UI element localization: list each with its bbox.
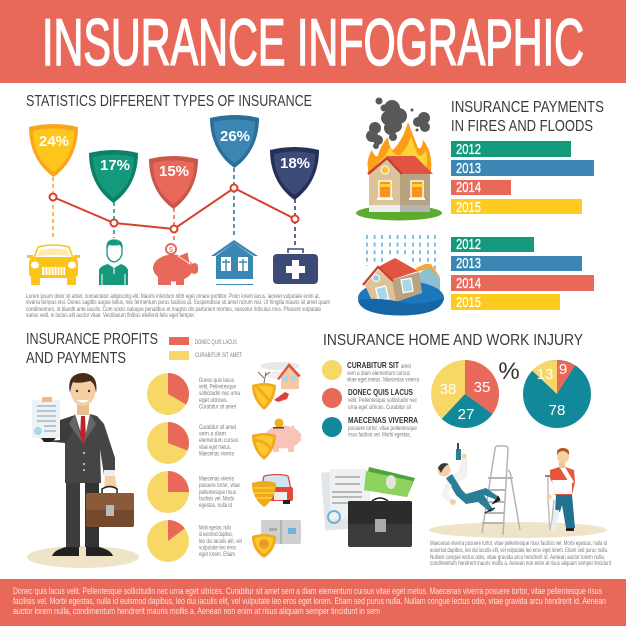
shield: 24%	[29, 124, 78, 177]
text block three: pellentesque risus	[199, 490, 236, 496]
legend: CURABITUR SIT AMET	[195, 353, 242, 359]
shield: 17%: 17%	[100, 157, 130, 174]
icon: parcel shield	[252, 520, 301, 558]
icon: piggy bank: $	[169, 247, 173, 254]
legend item: curabitur	[322, 360, 419, 384]
legend item: curabitur: amet	[401, 364, 411, 370]
text block two: Curabitur sit amet	[199, 425, 236, 431]
shield: 15%	[149, 156, 198, 209]
illustration: ladder	[482, 446, 520, 535]
icon: medical case	[273, 249, 318, 284]
bar chart: floods: 2014	[456, 275, 481, 292]
text block two: Maecenas viverra	[199, 452, 234, 458]
line chart	[50, 184, 298, 232]
illustration: burning house	[356, 98, 442, 220]
pie: second	[147, 422, 189, 464]
pie: third	[147, 471, 189, 513]
footer text: auctor lorem nulla, condimentum hendrerit mauris mollis a. Aenean non enim at risus aliquam semper tincidunt in sem	[13, 606, 380, 616]
panel: home and work injury	[321, 332, 611, 567]
shield: 18%	[270, 147, 319, 200]
pie: work: 9	[559, 361, 567, 378]
shield: 18%: 18%	[280, 155, 310, 172]
pie: fourth	[147, 520, 189, 562]
text: statistics lorem: varius velit, in luctus elit auctor vitae. Vestibulum finibus eleifend felis eget tempor.	[26, 313, 195, 319]
heading: statistics: STATISTICS DIFFERENT TYPES OF INSURANCE	[26, 93, 312, 110]
text block four: vulputate leo eros	[199, 546, 236, 552]
legend item: curabitur: CURABITUR SIT	[347, 360, 400, 370]
shield: 17%	[89, 150, 138, 203]
icon: house	[211, 240, 258, 285]
legend item: curabitur: sem a diam elementum cursus	[347, 371, 410, 377]
text block one: Curabitur sit amet	[199, 404, 236, 410]
legend: DONEC QUIS LACUS	[195, 340, 237, 346]
illustration: ground	[429, 522, 607, 538]
pie: home: 38	[440, 381, 456, 398]
text block one	[199, 378, 241, 410]
panel: statistics	[26, 93, 330, 319]
pie: home: 35	[474, 379, 490, 396]
shield: 26%	[210, 115, 259, 168]
dashed connectors	[53, 168, 295, 246]
bar chart: fires: 2013	[456, 160, 481, 177]
icon: person	[99, 240, 128, 285]
icon: piggy shield	[252, 418, 301, 460]
bar chart: fires	[451, 141, 594, 216]
icon: piggy bank	[153, 243, 198, 285]
bar chart: floods	[451, 236, 594, 311]
bar chart: floods: 2015	[456, 294, 481, 311]
text block three: Maecenas viverra	[199, 476, 234, 482]
bar chart: floods: 2012	[456, 236, 481, 253]
legend item: maecenas: MAECENAS VIVERRA	[348, 415, 418, 425]
bar chart: fires: 2015	[456, 199, 481, 216]
heading: injury: INSURANCE HOME AND WORK INJURY	[323, 332, 583, 349]
heading: profits	[26, 331, 158, 367]
text block four: leo dui iaculis elit, vel	[199, 539, 242, 545]
legend item: curabitur: vitae eget metus. Maecenas viverra	[347, 378, 419, 384]
legend item: donec: urna eget ultrices. Curabitur sit	[348, 405, 411, 411]
pie: first	[147, 373, 189, 415]
footer band	[0, 579, 626, 626]
text block one: sollicitudin nec urna	[199, 391, 241, 397]
text: statistics lorem	[26, 294, 330, 319]
heading: profits: AND PAYMENTS	[26, 350, 126, 367]
heading: profits: INSURANCE PROFITS	[26, 331, 158, 348]
heading: payments: IN FIRES AND FLOODS	[451, 118, 593, 135]
shield: 26%: 26%	[220, 128, 250, 145]
shield: 24%: 24%	[39, 133, 69, 150]
text block three: facilisis vel. Morbi	[199, 496, 234, 502]
legend item: maecenas: posuere tortor, vitae pellentesque	[348, 426, 418, 432]
text: statistics lorem: viverra tempus nisl. Donec sagittis augue tellus, nec fermentum purus facilisis at. Suspendisse sit amet rutrum nisl. Ut fringilla mauris sit amet quam	[26, 300, 330, 306]
text block two: elementum cursus	[199, 438, 238, 444]
percent sign: %	[498, 358, 520, 385]
legend item: donec: DONEC QUIS LACUS	[348, 387, 413, 397]
pie: work: 78	[549, 402, 565, 419]
text block one: Donec quis lacus	[199, 378, 234, 384]
pie: work	[523, 360, 591, 428]
text: statistics lorem: Lorem ipsum dolor sit amet, consectetur adipiscing elit. Mauris interdum nibh eget ornare porttitor. Proin lorem lacus, laoreet vulputate enim at,	[26, 294, 320, 300]
legend item: donec: velit. Pellentesque sollicitudin nec	[348, 398, 417, 404]
text block four: eget lorem. Etiam	[199, 552, 235, 558]
shield: 15%: 15%	[159, 163, 189, 180]
text block four	[199, 526, 242, 558]
pie: home: 27	[458, 406, 474, 423]
legend item: maecenas	[322, 415, 418, 438]
pie: home	[431, 360, 499, 428]
heading: payments	[451, 99, 604, 135]
illustration: businessman	[27, 373, 139, 568]
legend item: donec	[322, 387, 417, 411]
illustration: documents, money and briefcase	[321, 467, 415, 547]
legend	[169, 337, 242, 360]
bar chart: fires: 2012	[456, 141, 481, 158]
icon: disaster shield	[252, 362, 301, 410]
text block two	[199, 425, 238, 458]
bar chart: fires: 2014	[456, 179, 481, 196]
text block three: posuere tortor, vitae	[199, 483, 241, 489]
illustration: falling worker	[438, 443, 500, 513]
text block three	[199, 476, 241, 509]
header band	[0, 0, 626, 83]
panel: fires and floods	[356, 98, 604, 316]
text block one: velit. Pellentesque	[199, 384, 236, 390]
text: injury lorem	[430, 541, 611, 567]
bar chart: floods: 2013	[456, 255, 481, 272]
footer text	[13, 586, 606, 616]
text block four: Morbi egestas, nulla	[199, 526, 231, 532]
text block two: vitae eget metus.	[199, 445, 231, 451]
text: statistics lorem: condimentum, id blandit ante iaculis. Cum sociis natoque penatibus et magnis dis parturient montes, nascetur ridiculus mus. Phasent vulputate	[26, 307, 322, 313]
illustration: injured man	[545, 448, 575, 531]
text block three: egestas, nulla id	[199, 503, 232, 509]
text block two: sem a diam	[199, 432, 226, 438]
legend item: maecenas: risus facilisis vel. Morbi egestas,	[348, 432, 411, 438]
icon: car shield	[252, 474, 293, 507]
text block four: id euismod dapibus,	[199, 532, 233, 538]
pie: work: 13	[537, 366, 553, 383]
icon: car	[27, 245, 80, 285]
panel: profits and payments	[26, 331, 301, 568]
text block one: eget ultrices.	[199, 398, 228, 404]
illustration: flooded house	[358, 235, 444, 316]
